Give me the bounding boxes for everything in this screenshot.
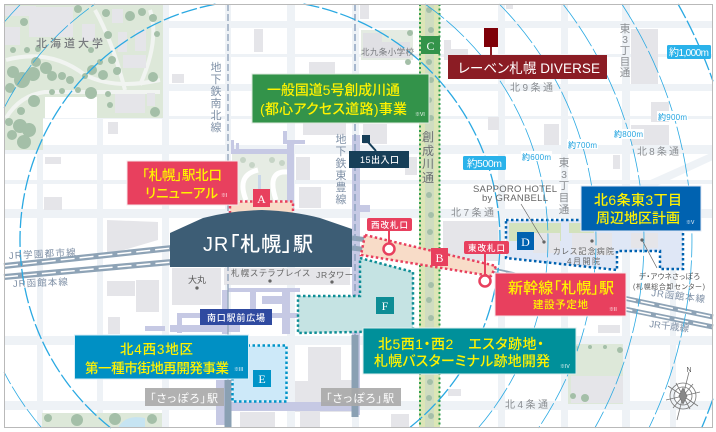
Namboku subway label: 北	[210, 109, 222, 122]
zone E: North 4 West 3 district	[232, 346, 286, 402]
Namboku subway label: 南	[210, 97, 222, 110]
distance labels: 約500m	[467, 157, 502, 170]
zone badge F	[376, 297, 394, 314]
zone badge B	[431, 248, 448, 266]
callout: Sapporo station north exit: 「札幌」駅北口	[142, 168, 222, 183]
north park: Hokkaido University	[4, 4, 163, 150]
subway lines	[228, 4, 355, 428]
distance labels: 約700m	[568, 140, 597, 150]
east gate marker	[464, 241, 509, 286]
callout: Sapporo station north exit: リニューアル	[145, 186, 218, 201]
railway labels: JR函館本線	[13, 276, 69, 290]
callout: North 4 West 3	[74, 335, 248, 379]
railway lines	[4, 238, 713, 327]
west gate marker: 西改札口	[371, 220, 408, 230]
place labels: 北海道大学	[36, 36, 103, 50]
east park	[568, 344, 623, 404]
distance labels: 約900m	[658, 112, 687, 122]
callout: North 5 West 1-2: 北5西1・西2 エスタ跡地・	[378, 336, 544, 352]
callout: North 4 West 3: 第一種市街地再開発事業	[85, 360, 230, 376]
green corridor: Sosei River	[419, 4, 440, 428]
callout: Route 5 Sosei River Street: (都心アクセス道路)事業	[260, 101, 407, 117]
East 3 street label, north: 東	[620, 22, 631, 35]
place labels: 4月開院	[567, 257, 600, 266]
east gate marker: 東改札口	[468, 243, 505, 253]
place labels: 北九条小学校	[361, 47, 414, 57]
vertical street labels	[210, 22, 631, 216]
property label	[448, 55, 607, 79]
elementary school grounds	[361, 30, 413, 65]
place labels: 北7条通	[451, 206, 494, 219]
callout: North 6 East 3: 北6条東3丁目	[594, 192, 682, 208]
East 3 street label, south: 通	[559, 204, 570, 216]
place labels: by GRANBELL	[482, 193, 548, 204]
Sosei River street label: 成	[422, 144, 434, 158]
place labels: 北8条通	[637, 145, 679, 158]
Namboku subway label: 下	[210, 74, 222, 86]
place labels: 札幌ステラプレイス	[231, 268, 310, 278]
zone D: North 6 East 3 district	[506, 220, 683, 270]
place labels: 大丸	[188, 274, 206, 285]
callout: North 6 East 3	[581, 186, 701, 231]
distance labels: 約1,000m	[669, 46, 709, 59]
callout: Shinkansen Sapporo station	[495, 273, 626, 316]
callout: Route 5 Sosei River Street	[252, 74, 429, 123]
distance labels: 約600m	[522, 152, 551, 162]
JR Sapporo station: JR「札幌」駅	[203, 233, 313, 256]
compass	[666, 367, 700, 420]
place labels: 北9条通	[510, 81, 553, 94]
place labels: JRタワー	[316, 270, 353, 280]
callout: Sapporo station north exit: ※I	[221, 193, 227, 199]
Sosei River street label: 通	[422, 171, 434, 185]
subway exit 15	[349, 135, 409, 168]
compass: N	[686, 367, 692, 374]
Namboku subway label: 地	[210, 61, 222, 74]
JR Sapporo station	[170, 210, 352, 267]
Namboku subway label: 線	[210, 121, 222, 134]
south park	[42, 413, 162, 428]
station north square	[232, 153, 289, 201]
zone badge C	[421, 36, 440, 54]
Toho subway label: 地	[336, 133, 346, 146]
railway labels: JR千歳線	[649, 318, 690, 335]
south plaza label: 南口駅前広場	[207, 312, 265, 323]
East 3 street label, south: 丁	[559, 180, 569, 192]
callout: North 5 West 1-2: 札幌バスターミナル跡地開発	[374, 353, 550, 369]
callout: North 4 West 3: 北4西3地区	[120, 342, 193, 357]
callout: North 4 West 3: ※III	[234, 367, 243, 373]
callout: Route 5 Sosei River Street: 一般国道5号創成川通	[267, 82, 400, 98]
callout: Shinkansen Sapporo station: 建設予定地	[533, 298, 588, 311]
callout: Route 5 Sosei River Street: ※VI	[415, 112, 425, 118]
place labels: (札幌総合卸センター)	[633, 282, 705, 291]
railway labels: JR学園都市線	[9, 246, 77, 262]
Sosei River street label: 川	[422, 157, 434, 171]
distance labels	[463, 45, 711, 170]
callout: North 6 East 3: 周辺地区計画	[596, 210, 680, 226]
Toho subway label: 鉄	[336, 156, 346, 170]
pedestrian concourses	[145, 131, 370, 425]
property marker	[484, 28, 498, 56]
callout: North 5 West 1-2: ※IV	[560, 364, 570, 370]
Sapporo station label, east	[321, 388, 401, 406]
East 3 street label, north: 目	[620, 56, 630, 68]
zone badge A	[253, 189, 270, 207]
zone badge C: C	[426, 39, 435, 53]
Sapporo station label, west	[145, 388, 224, 406]
East 3 street label, south: 東	[559, 156, 570, 169]
Toho subway label: 東	[336, 169, 346, 182]
zone badge E: E	[258, 372, 266, 386]
west gate marker	[367, 218, 412, 254]
property label: レーベン札幌 DIVERSE	[458, 61, 600, 76]
building markers and leaders	[196, 204, 657, 289]
distance labels: 約800m	[614, 129, 643, 139]
south plaza label	[200, 309, 272, 325]
Toho subway label: 豊	[336, 181, 346, 194]
Toho subway label: 下	[336, 146, 346, 158]
railway labels	[9, 246, 706, 335]
railway labels: JR函館本線	[651, 287, 706, 306]
zone badge D: D	[521, 235, 530, 249]
place labels: デ・アウネさっぽろ	[639, 271, 700, 281]
zone badge A: A	[257, 192, 266, 206]
place labels: SAPPORO HOTEL	[473, 184, 557, 195]
Sapporo station label, east: 「さっぽろ」駅	[326, 392, 394, 405]
subway exit 15: 15出入口	[360, 154, 399, 165]
Namboku subway label: 鉄	[210, 84, 222, 98]
zone A: north exit strip	[230, 202, 293, 214]
East 3 street label, north: 3	[622, 34, 628, 46]
East 3 street label, north: 通	[620, 67, 631, 79]
zone badge F: F	[382, 299, 389, 313]
callout: Sapporo station north exit	[127, 161, 238, 205]
callout: Shinkansen Sapporo station: ※II	[609, 307, 617, 313]
callout: Shinkansen Sapporo station: 新幹線「札幌」駅	[508, 280, 614, 297]
zone badge B: B	[435, 251, 444, 265]
callout: North 6 East 3: ※V	[686, 220, 695, 226]
zone badge D	[517, 232, 534, 250]
East 3 street label, south: 3	[561, 169, 567, 181]
East 3 street label, south: 目	[559, 192, 569, 204]
callout: North 5 West 1-2	[363, 328, 576, 374]
place labels: 北4条通	[505, 398, 548, 411]
Sapporo station label, west: 「さっぽろ」駅	[150, 392, 218, 405]
zone badge E	[253, 370, 271, 387]
East 3 street label, north: 丁	[620, 45, 630, 57]
place labels: カレス記念病院	[553, 247, 614, 256]
Toho subway label: 線	[336, 193, 346, 206]
Sosei River street label: 創	[422, 130, 434, 144]
zone B: Shinkansen station strip	[361, 235, 496, 276]
zone F: Esta and bus terminal site	[298, 258, 413, 333]
